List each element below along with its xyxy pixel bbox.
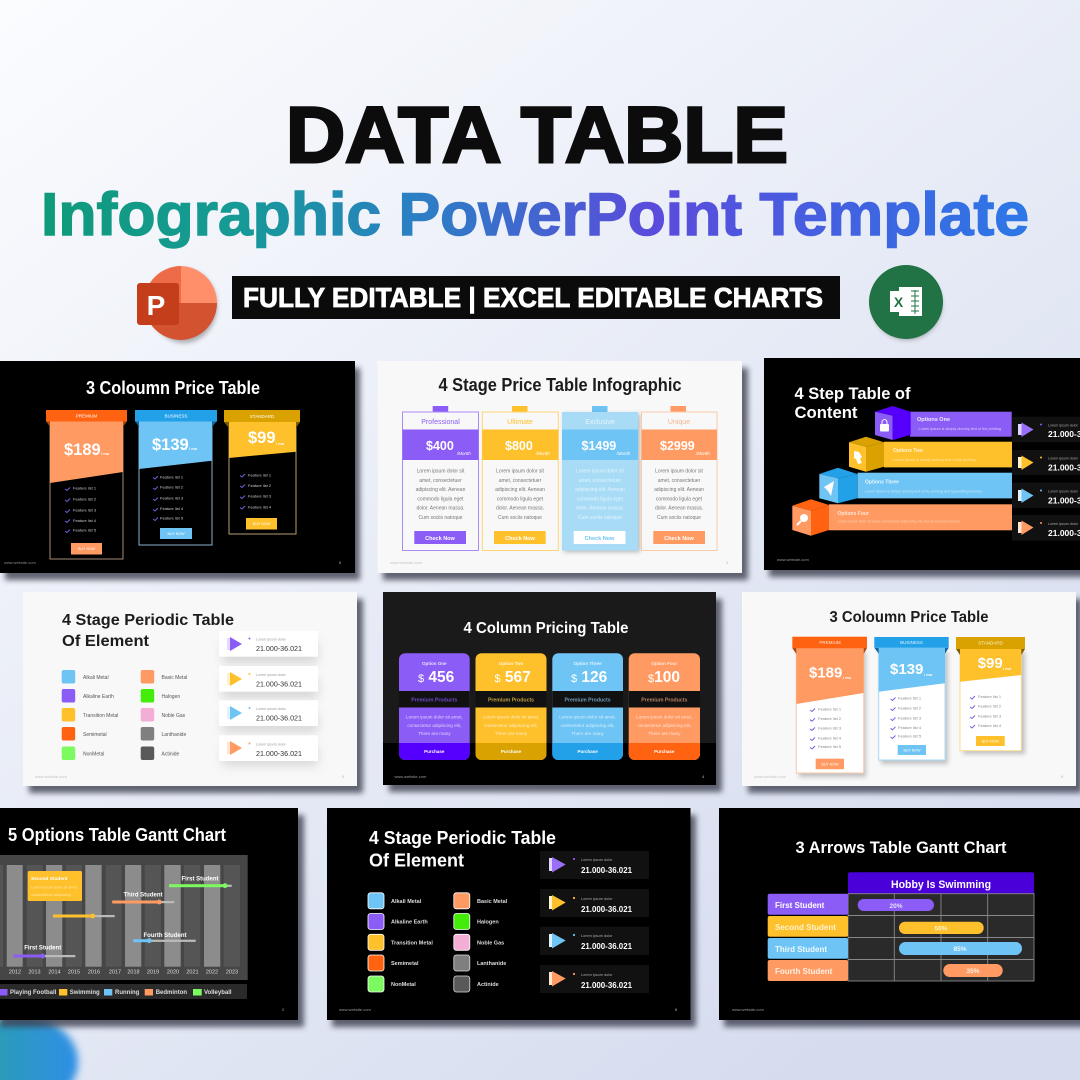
column: exclusive: Lorem ipsum dolor sit <box>576 468 625 474</box>
column: professional: Check Now <box>425 536 456 542</box>
legend: element swatches: Noble Gas <box>477 940 504 946</box>
column: business: / mo <box>924 672 933 677</box>
chart: Gantt grid: 2019 <box>147 970 159 976</box>
column: standard: $99 <box>978 655 1003 672</box>
step 2: Options Two <box>893 448 923 454</box>
column: standard: BUY NOW <box>253 522 271 526</box>
column: professional: /Month <box>456 451 471 456</box>
column: business: Feature list 2 <box>160 484 184 490</box>
chart: Gantt grid: 2017 <box>109 970 121 976</box>
column: standard: STANDARD <box>250 414 275 419</box>
legend: element swatches <box>62 670 187 760</box>
card: option three: Premium Products <box>565 698 611 704</box>
column: exclusive: Cum sociis natoque <box>578 515 622 521</box>
panel: 4 stage price table <box>378 361 748 580</box>
heading: Of Element <box>62 633 150 650</box>
value card 3: Lorem ipsum dolor <box>256 707 287 711</box>
heading: 3 Coloumn Price Table <box>830 609 989 626</box>
column: unique <box>642 406 717 550</box>
column: premium: BUY NOW <box>821 762 839 766</box>
column: business <box>874 637 949 764</box>
row labels: First Student <box>775 901 825 910</box>
column: professional: Professional <box>421 419 460 426</box>
row labels: Third Student <box>775 945 827 954</box>
column: standard: Feature list 4 <box>978 723 1002 728</box>
column: business: $139 <box>890 661 923 678</box>
heading: Content <box>794 403 858 422</box>
callout: second student: consectetuer adipiscing <box>31 893 71 897</box>
legend: element swatches: Halogen <box>477 920 499 926</box>
column: unique: dolor. Aenean massa. <box>655 506 703 512</box>
column: unique: commodo ligula eget <box>656 496 703 502</box>
legend: element swatches <box>368 893 508 992</box>
value card 2 <box>219 666 318 699</box>
column: standard: / mo <box>1003 666 1012 671</box>
chart: Gantt grid: 2021 <box>186 970 199 976</box>
bar: 35% <box>943 964 1003 977</box>
value card 2: 21.000-36.021 <box>581 904 632 914</box>
column: ultimate: Check Now <box>505 536 536 542</box>
heading: 3 Coloumn Price Table <box>86 378 260 398</box>
value card 1 <box>219 631 318 664</box>
banner: fully editable <box>232 276 840 319</box>
column: exclusive: amet, consectetuer <box>579 478 622 484</box>
column: premium: / mo <box>101 451 110 456</box>
legend: element swatches: Noble Gas <box>162 713 186 719</box>
column: premium: $189 <box>809 665 842 682</box>
column: unique: Unique <box>668 419 690 426</box>
card: option one: There are many <box>418 731 451 736</box>
column: business: Feature list 1 <box>898 696 922 700</box>
bar: first student green <box>169 876 232 888</box>
column: ultimate: dolor. Aenean massa. <box>496 506 544 512</box>
value card 2: Lorem ipsum dolor <box>256 673 287 677</box>
chart: Gantt grid: 2013 <box>28 970 41 976</box>
legend: element swatches: Alkali Metal <box>83 675 109 681</box>
card: option three: consectetur adipiscing elit, <box>561 723 615 728</box>
subtitle: Infographic PowerPoint Template: Infographic PowerPoint Template <box>41 181 1029 248</box>
legend: element swatches: Alkali Metal <box>391 899 422 905</box>
column: ultimate: /Month <box>535 451 550 456</box>
card: option two: Purchase <box>501 749 522 754</box>
column: unique: Lorem ipsum dolor sit <box>655 468 704 474</box>
step 1: Lorem Ipsum is simply dummy text of the printing <box>918 427 1001 431</box>
legend: element swatches: Lanthanide <box>162 732 186 738</box>
step 4: Lorem ipsum dolor sit amet, consectetur adipiscing elit, sed do eiusmod tempor <box>838 520 961 524</box>
column: exclusive: commodo ligula eget <box>577 496 624 502</box>
column: business: Feature list 4 <box>160 506 184 511</box>
panel: 4 stage periodic table (light) <box>23 592 363 793</box>
chart: Gantt grid: 2016 <box>88 970 100 976</box>
column: premium: Feature list 4 <box>73 518 97 523</box>
value card 3 <box>540 927 649 955</box>
column: business: BUSINESS <box>165 414 187 418</box>
bar: 20% <box>858 899 934 911</box>
bar: 20%: 20% <box>889 903 903 910</box>
footer: www.website.com <box>339 1007 371 1012</box>
card: option three: Purchase <box>577 749 598 754</box>
column: standard: BUY NOW <box>982 740 999 744</box>
column: premium: Feature list 4 <box>818 736 842 740</box>
step 1: Options One <box>917 417 950 423</box>
step 3: Lorem Ipsum is simply dummy text of the printing and typesetting industry <box>865 490 982 494</box>
card: option four: consectetur adipiscing elit, <box>637 723 691 728</box>
bar: 50%: 50% <box>934 926 948 932</box>
column: ultimate: Ultimate <box>507 419 533 426</box>
chart: Gantt grid: 2012 <box>9 970 21 976</box>
panel: 4 column pricing table <box>383 592 722 792</box>
column: ultimate: Lorem ipsum dolor sit <box>496 468 545 474</box>
column: unique: adipiscing elit. Aenean <box>654 487 704 493</box>
card: option three: $ 126 <box>571 669 608 686</box>
column: ultimate: commodo ligula eget <box>497 496 544 502</box>
column: unique: Cum sociis natoque <box>657 515 701 521</box>
column: business <box>135 410 217 545</box>
bar: first student purple <box>13 946 75 958</box>
value card 3: 21.000-36.021 <box>256 714 302 722</box>
heading: 4 Stage Periodic Table <box>62 612 234 629</box>
column: premium: / mo <box>843 675 852 680</box>
column: exclusive: Check Now <box>585 536 615 542</box>
column: business: / mo <box>189 446 198 451</box>
page number: 6 <box>339 560 342 565</box>
column: premium: Feature list 2 <box>73 496 97 502</box>
table header: Hobby Is Swimming <box>891 879 991 891</box>
heading: 4 Stage Price Table Infographic <box>438 375 682 395</box>
column: standard: Feature list 2 <box>248 483 272 488</box>
column: ultimate <box>482 406 558 550</box>
bar: third student orange <box>112 893 174 904</box>
column: standard: $99 <box>248 429 276 447</box>
card: option four: $100 <box>648 669 680 686</box>
column: premium: Feature list 1 <box>73 486 97 490</box>
column: standard: Feature list 1 <box>978 694 1002 699</box>
value card 1: Lorem ipsum dolor <box>256 638 287 642</box>
column: unique: $2999 <box>660 439 695 453</box>
bar: fourth student blue <box>133 933 196 943</box>
column: exclusive: Exclusive <box>585 419 615 426</box>
column: business: Feature list 5 <box>160 516 184 520</box>
table header <box>848 872 1034 894</box>
value card 1 <box>1012 417 1080 442</box>
value card 1: Lorem ipsum dolor <box>1048 424 1079 428</box>
value card 4 <box>540 965 649 993</box>
column: business: $139 <box>152 436 189 454</box>
chart: Gantt grid: 2020 <box>167 970 179 976</box>
table grid <box>848 894 1034 981</box>
column: premium: Feature list 3 <box>73 508 97 512</box>
column: premium: Feature list 2 <box>818 716 842 721</box>
column: premium <box>46 410 127 559</box>
value card 4: Lorem ipsum dolor <box>256 742 287 746</box>
column: exclusive: $1499 <box>582 439 616 453</box>
panel: 3 arrows table Gantt chart <box>719 808 1080 1027</box>
column: professional: Lorem ipsum dolor sit <box>417 468 465 474</box>
card: option two: Lorem ipsum dolor sit amet, <box>483 714 539 720</box>
column: premium: Feature list 5 <box>818 744 842 749</box>
column: professional <box>402 406 478 550</box>
panel: 4 stage periodic table (dark) <box>327 808 696 1027</box>
card: option four <box>629 653 700 760</box>
bar: 35%: 35% <box>966 968 980 975</box>
legend: element swatches: Actinide <box>162 752 180 758</box>
heading: 5 Options Table Gantt Chart <box>8 825 226 845</box>
column: premium: PREMIUM <box>76 414 97 418</box>
callout: second student: Second Student <box>31 876 68 882</box>
column: premium: PREMIUM <box>819 640 841 645</box>
column: standard <box>224 410 300 534</box>
column: professional: dolor. Aenean massa. <box>416 506 465 512</box>
footer: www.website.com <box>754 774 786 779</box>
value card 3: Lorem ipsum dolor <box>581 934 613 938</box>
legend: element swatches: Transition Metal <box>391 940 433 946</box>
card: option two: There are many <box>495 731 528 736</box>
icon: PowerPoint logo <box>137 266 217 343</box>
legend: element swatches: Semimetal <box>391 961 419 967</box>
column: exclusive: /Month <box>616 451 631 456</box>
heading: 4 Column Pricing Table <box>464 620 629 637</box>
legend: element swatches: Actinide <box>477 982 499 988</box>
footer: www.website.com <box>390 560 422 565</box>
legend: Running <box>115 990 140 996</box>
value card 4: 21.000-36.021 <box>256 749 302 758</box>
bar: fourth student blue: Fourth Student <box>144 933 186 939</box>
legend <box>0 984 247 999</box>
value card 1: 21.000-36.021 <box>256 644 302 653</box>
column: standard <box>956 637 1025 754</box>
column: standard: Feature list 3 <box>978 714 1002 718</box>
column: business: Feature list 5 <box>898 734 922 738</box>
footer: www.website.com <box>394 774 427 779</box>
footer: www.website.com <box>732 1007 764 1012</box>
row labels: Fourth Student <box>775 967 833 976</box>
chart: Gantt grid <box>0 855 248 980</box>
title: DATA TABLE: DATA TABLE <box>286 90 788 179</box>
page number: 6 <box>1061 774 1064 779</box>
card: option one: Premium Products <box>411 698 457 704</box>
bar: 50% <box>899 922 984 934</box>
column: ultimate: $800 <box>505 439 533 453</box>
legend: Swimming <box>70 990 100 996</box>
column: business: Feature list 3 <box>160 496 184 500</box>
column: professional: $400 <box>426 439 454 453</box>
card: option four: There are many <box>648 731 681 736</box>
page number: 5 <box>342 774 345 779</box>
card: option four: Purchase <box>654 749 675 754</box>
column: unique: Check Now <box>664 536 695 542</box>
card: option two <box>476 653 546 760</box>
chart: Gantt grid: 2015 <box>68 970 80 976</box>
column: exclusive: adipiscing elit. Aenean <box>575 487 625 493</box>
row labels: Second Student <box>775 923 836 932</box>
bar: first student purple: First Student <box>24 946 61 952</box>
legend: element swatches: Basic Metal <box>162 675 187 681</box>
card: option three: Option Three <box>574 661 602 666</box>
value card 4 <box>219 735 318 766</box>
legend: Volleyball <box>204 990 232 996</box>
column: standard: Feature list 3 <box>248 494 272 498</box>
value card 2 <box>1012 450 1080 475</box>
heading: 3 Arrows Table Gantt Chart <box>796 838 1007 857</box>
legend: element swatches: Semimetal <box>83 732 107 738</box>
column: ultimate: amet, consectetuer <box>499 478 542 484</box>
value card 3: Lorem ipsum dolor <box>1048 490 1079 494</box>
card: option two: Premium Products <box>488 698 534 704</box>
card: option two: Option Two <box>499 661 523 666</box>
column: professional: Cum sociis natoque <box>419 515 463 521</box>
value card 4: Lorem ipsum dolor <box>581 973 613 977</box>
bar: 85%: 85% <box>953 946 967 953</box>
column: business: Feature list 1 <box>160 474 184 480</box>
card: option four: Option Four <box>651 661 677 666</box>
column: professional: amet, consectetuer <box>419 478 462 484</box>
step 3 <box>819 468 1012 503</box>
bar: second student yellow <box>53 914 115 918</box>
heading: 4 Stage Periodic Table <box>369 828 556 848</box>
value card 2: Lorem ipsum dolor <box>1048 456 1079 460</box>
legend: element swatches: Transition Metal <box>83 713 118 719</box>
legend: element swatches: Alkaline Earth <box>391 920 428 926</box>
card: option two: $ 567 <box>494 669 531 686</box>
column: unique: amet, consectetuer <box>658 478 701 484</box>
column: professional: commodo ligula eget <box>417 496 464 502</box>
decorative blob bottom left <box>0 1016 78 1080</box>
footer: www.website.com <box>35 774 67 779</box>
column: premium: BUY NOW <box>78 547 96 551</box>
value card 1 <box>540 851 649 879</box>
row labels <box>768 894 848 981</box>
panel: 3 column price table (dark) <box>0 361 360 580</box>
page number: 6 <box>675 1007 678 1012</box>
step 2: Lorem Ipsum is simply dummy text of the printing <box>893 458 976 462</box>
card: option four: Premium Products <box>641 698 687 704</box>
column: standard: Feature list 4 <box>248 504 272 510</box>
legend: Bedminton <box>156 990 187 996</box>
value card 2 <box>540 889 649 917</box>
column: premium: $189 <box>64 441 101 459</box>
chart: Gantt grid: 2014 <box>48 970 61 976</box>
callout: second student <box>28 871 82 901</box>
chart: Gantt grid: 2022 <box>206 970 218 976</box>
value card 3 <box>1012 482 1080 508</box>
legend: element swatches: Halogen <box>162 694 180 700</box>
column: standard: STANDARD <box>978 640 1003 646</box>
column: business: BUY NOW <box>903 748 921 752</box>
icon: Excel logo: X <box>894 294 904 310</box>
value card 3: 21.000-36.021 <box>581 941 632 951</box>
value card 2: Lorem ipsum dolor <box>581 897 613 901</box>
legend: element swatches: Alkaline Earth <box>83 694 114 700</box>
panel: 3 column price table (light) <box>742 592 1080 793</box>
column: standard: / mo <box>276 441 285 446</box>
page number: 2 <box>282 1007 285 1012</box>
value card 4 <box>1012 515 1080 541</box>
step 3: Options Three <box>865 480 899 486</box>
footer: www.website.com <box>777 557 809 562</box>
card: option four: Lorem ipsum dolor sit amet, <box>636 714 693 720</box>
card: option one: Lorem ipsum dolor sit amet, <box>406 714 463 720</box>
bar: third student orange: Third Student <box>124 893 162 899</box>
value card 4: Lorem ipsum dolor <box>1048 522 1079 526</box>
banner: fully editable: FULLY EDITABLE | EXCEL EDITABLE CHARTS <box>243 282 823 313</box>
bar: 85% <box>899 942 1022 955</box>
heading: 4 Step Table of <box>794 384 911 403</box>
card: option three <box>552 653 623 760</box>
column: exclusive: dolor. Aenean massa. <box>576 506 624 512</box>
column: business: Feature list 4 <box>898 725 922 730</box>
column: premium: Feature list 1 <box>818 706 842 712</box>
column: premium: Feature list 5 <box>73 528 97 532</box>
step 4 <box>792 499 1012 536</box>
column: standard: Feature list 2 <box>978 704 1002 708</box>
legend: element swatches: Basic Metal <box>477 899 508 905</box>
card: option one <box>399 653 470 760</box>
chart: Gantt grid: 2018 <box>127 970 140 976</box>
value card 1: Lorem ipsum dolor <box>581 858 613 862</box>
value card 4: 21.000-36.021 <box>581 980 632 990</box>
column: business: Feature list 3 <box>898 716 922 720</box>
value card 2: 21.000-36.021 <box>256 680 302 688</box>
card: option three: There are many <box>571 731 605 736</box>
panel: 5 options Gantt chart <box>0 808 304 1027</box>
column: ultimate: Cum sociis natoque <box>498 515 542 521</box>
column: unique: /Month <box>695 451 710 456</box>
card: option one: Option One <box>422 661 447 666</box>
legend: element swatches: NonMetal <box>83 752 104 758</box>
legend: Playing Football <box>10 990 57 996</box>
value card 3 <box>219 700 318 733</box>
step 4: Options Four <box>838 511 869 517</box>
page number: 3 <box>726 560 729 565</box>
column: premium: Feature list 3 <box>818 726 842 730</box>
column: business: BUY NOW <box>167 532 185 536</box>
icon: PowerPoint logo: P <box>147 290 165 321</box>
card: option one: $ 456 <box>418 669 455 686</box>
callout: second student: Lorem ipsum dolor sit amet, <box>31 886 78 890</box>
page number: 4 <box>702 774 705 779</box>
legend: element swatches: NonMetal <box>391 982 416 988</box>
value card 1: 21.000-36.021 <box>581 865 632 875</box>
icon: Excel logo <box>869 265 943 340</box>
column: exclusive <box>562 406 640 552</box>
card: option one: consectetur adipiscing elit, <box>407 723 461 728</box>
heading: Of Element <box>369 851 464 871</box>
column: standard: Feature list 1 <box>248 472 272 478</box>
legend: element swatches: Lanthanide <box>477 961 506 967</box>
card: option two: consectetur adipiscing elit, <box>484 723 538 728</box>
card: option three: Lorem ipsum dolor sit amet, <box>559 714 616 720</box>
column: business: Feature list 2 <box>898 706 922 710</box>
chart: Gantt grid: 2023 <box>226 970 238 976</box>
footer: www.website.com <box>4 560 36 565</box>
card: option one: Purchase <box>424 749 445 754</box>
bar: first student green: First Student <box>182 876 219 882</box>
column: professional: adipiscing elit. Aenean <box>416 487 466 493</box>
panel: 4 step table of content <box>764 358 1080 577</box>
step 1 <box>875 406 1012 440</box>
column: ultimate: adipiscing elit. Aenean <box>495 487 545 493</box>
step 2 <box>849 437 1012 472</box>
column: premium <box>792 637 867 777</box>
column: business: BUSINESS <box>900 640 923 645</box>
